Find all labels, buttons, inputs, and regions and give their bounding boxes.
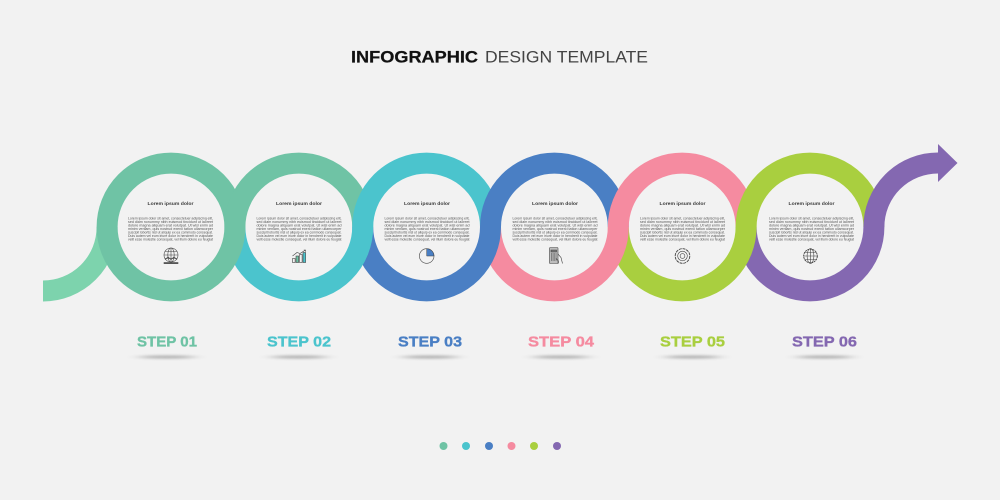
text block: step 4: Duis autem vel eum iriure dolor in hendrerit in vulputate: [512, 234, 598, 238]
text block: step 2: Lorem ipsum dolor: [276, 201, 322, 207]
text block: step 5: velit esse molestie consequat, vel illum dolore eu feugiat: [640, 238, 725, 242]
text block: step 6: dolore magna aliquam erat volutpat. Ut wisi enim ad: [769, 224, 854, 228]
text block: step 3: [384, 201, 470, 242]
text block: step 6: Duis autem vel eum iriure dolor in hendrerit in vulputate: [769, 234, 854, 238]
text block: step 1: suscipit lobortis nisl ut aliquip ex ea commodo consequat.: [128, 230, 213, 234]
arrow: [874, 144, 958, 227]
text block: step 3: Duis autem vel eum iriure dolor in hendrerit in vulputate: [384, 234, 470, 238]
ribbon lower arcs: [107, 227, 874, 291]
step labels: [137, 334, 857, 350]
text block: step 3: suscipit lobortis nisl ut aliquip ex ea commodo consequat.: [384, 230, 470, 234]
ribbon tail: [43, 227, 107, 291]
text block: step 6: velit esse molestie consequat, vel illum dolore eu feugiat: [769, 238, 854, 242]
text block: step 1: Duis autem vel eum iriure dolor in hendrerit in vulputate: [128, 234, 213, 238]
text block: step 6: Lorem ipsum dolor sit amet, consectetuer adipiscing elit,: [769, 216, 854, 220]
text block: step 4: minim veniam, quis nostrud exerci tation ullamcorper: [512, 227, 598, 231]
text block: step 2: velit esse molestie consequat, vel illum dolore eu feugiat: [256, 238, 342, 242]
text block: step 3: minim veniam, quis nostrud exerci tation ullamcorper: [384, 227, 470, 231]
text block: step 5: suscipit lobortis nisl ut aliquip ex ea commodo consequat.: [640, 230, 725, 234]
text block: step 2: Lorem ipsum dolor sit amet, consectetuer adipiscing elit,: [256, 216, 342, 220]
text block: step 6: [769, 201, 855, 242]
text block: step 5: minim veniam, quis nostrud exerci tation ullamcorper: [640, 227, 726, 231]
text block: step 4: Lorem ipsum dolor sit amet, consectetuer adipiscing elit,: [512, 216, 598, 220]
title: [351, 48, 648, 66]
step labels: STEP 02: [267, 334, 331, 350]
title: DESIGN TEMPLATE: [485, 48, 648, 66]
text block: step 2: dolore magna aliquam erat volutpat. Ut wisi enim ad: [256, 224, 342, 228]
text block: step 1: sed diam nonummy nibh euismod tincidunt ut laoreet: [128, 220, 213, 224]
text block: step 3: Lorem ipsum dolor sit amet, consectetuer adipiscing elit,: [384, 216, 470, 220]
text block: step 6: sed diam nonummy nibh euismod tincidunt ut laoreet: [769, 220, 854, 224]
step label shadows: [139, 355, 852, 359]
text block: step 2: Duis autem vel eum iriure dolor in hendrerit in vulputate: [256, 234, 342, 238]
text block: step 2: [256, 201, 342, 242]
ribbon upper arcs: [107, 163, 874, 227]
icon: pie chart: [419, 249, 434, 263]
text block: step 4: suscipit lobortis nisl ut aliquip ex ea commodo consequat.: [512, 230, 598, 234]
icon: growth chart: [292, 250, 306, 262]
text block: step 3: dolore magna aliquam erat volutpat. Ut wisi enim ad: [384, 224, 470, 228]
text block: step 3: velit esse molestie consequat, vel illum dolore eu feugiat: [384, 238, 470, 242]
text block: step 5: [640, 201, 726, 242]
step labels: STEP 04: [528, 334, 595, 350]
text block: step 2: suscipit lobortis nisl ut aliquip ex ea commodo consequat.: [256, 230, 342, 234]
text block: step 4: velit esse molestie consequat, vel illum dolore eu feugiat: [512, 238, 598, 242]
icon: concentric target: [675, 249, 690, 263]
text block: step 6: minim veniam, quis nostrud exerci tation ullamcorper: [769, 227, 855, 231]
text block: step 4: sed diam nonummy nibh euismod tincidunt ut laoreet: [512, 220, 598, 224]
step labels: STEP 06: [792, 334, 857, 350]
icon: globe with landscape: [164, 248, 178, 264]
text block: step 4: Lorem ipsum dolor: [532, 201, 578, 207]
step labels: STEP 03: [398, 334, 462, 350]
icon: calculator in hand: [550, 248, 562, 264]
text block: step 6: suscipit lobortis nisl ut aliquip ex ea commodo consequat.: [769, 230, 854, 234]
text block: step 3: Lorem ipsum dolor: [404, 201, 450, 207]
text block: step 4: dolore magna aliquam erat volutpat. Ut wisi enim ad: [512, 224, 598, 228]
text block: step 1: Lorem ipsum dolor sit amet, consectetuer adipiscing elit,: [128, 216, 213, 220]
text block: step 5: Lorem ipsum dolor: [660, 201, 706, 207]
text block: step 1: [128, 201, 214, 242]
text block: step 1: Lorem ipsum dolor: [148, 201, 194, 207]
text block: step 5: Lorem ipsum dolor sit amet, consectetuer adipiscing elit,: [640, 216, 725, 220]
text block: step 4: [512, 201, 598, 242]
text block: step 2: minim veniam, quis nostrud exerci tation ullamcorper: [256, 227, 342, 231]
text block: step 1: minim veniam, quis nostrud exerci tation ullamcorper: [128, 227, 214, 231]
text block: step 5: sed diam nonummy nibh euismod tincidunt ut laoreet: [640, 220, 725, 224]
text block: step 3: sed diam nonummy nibh euismod tincidunt ut laoreet: [384, 220, 470, 224]
legend dots: [440, 442, 561, 450]
text block: step 6: Lorem ipsum dolor: [788, 201, 835, 207]
step labels: STEP 05: [660, 334, 725, 350]
icon: mesh globe: [803, 248, 818, 264]
text block: step 5: Duis autem vel eum iriure dolor in hendrerit in vulputate: [640, 234, 725, 238]
step labels: STEP 01: [137, 334, 197, 350]
text block: step 1: velit esse molestie consequat, vel illum dolore eu feugiat: [128, 238, 213, 242]
text block: step 5: dolore magna aliquam erat volutpat. Ut wisi enim ad: [640, 224, 725, 228]
title: INFOGRAPHIC: [351, 48, 478, 66]
text block: step 2: sed diam nonummy nibh euismod tincidunt ut laoreet: [256, 220, 342, 224]
text block: step 1: dolore magna aliquam erat volutpat. Ut wisi enim ad: [128, 224, 213, 228]
